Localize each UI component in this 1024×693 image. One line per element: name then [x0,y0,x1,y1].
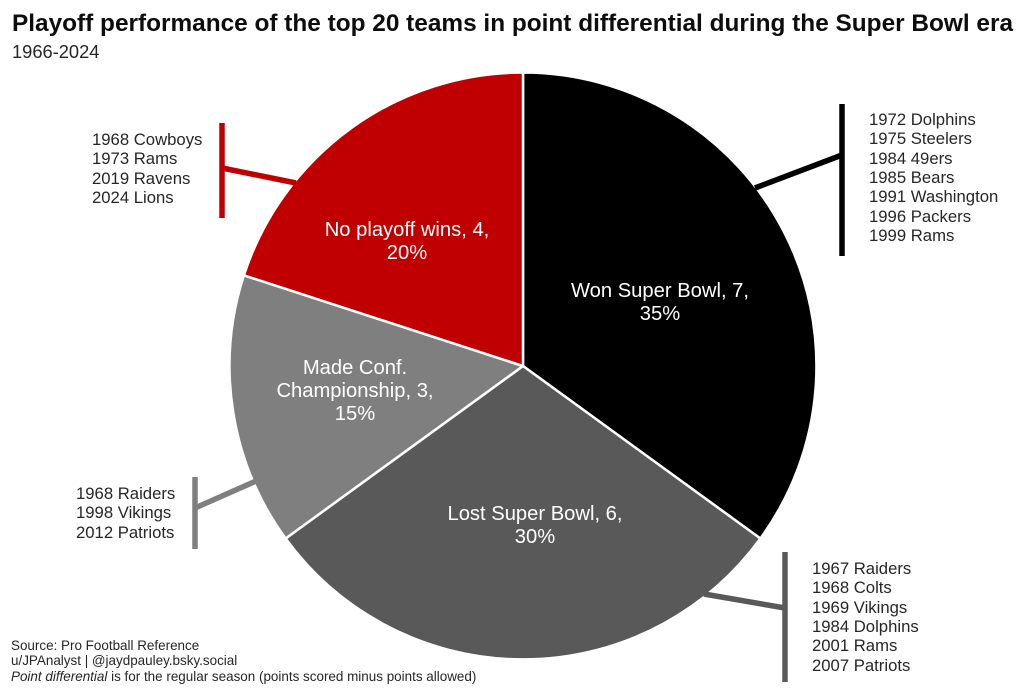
team list: won Super Bowl: 1996 Packers [869,207,971,226]
team list: lost Super Bowl: 1969 Vikings [812,598,907,617]
team list: made conference championship: 1998 Vikings [76,503,171,522]
title: Playoff performance of the top 20 teams in point differential during the Super Bowl era [12,10,1014,37]
team list: lost Super Bowl: 2007 Patriots [812,656,910,675]
bracket: won Super Bowl [755,104,842,256]
team list: made conference championship: 2012 Patriots [76,523,174,542]
bracket: lost Super Bowl [704,552,785,682]
team list: lost Super Bowl: 1968 Colts [812,578,892,597]
label: made conference championship: 15% [335,403,375,425]
team list: won Super Bowl: 1984 49ers [869,149,953,168]
label: no playoff wins: No playoff wins, 4, [325,219,489,241]
team list: lost Super Bowl: 1967 Raiders [812,559,911,578]
team list: won Super Bowl: 1985 Bears [869,168,954,187]
subtitle: 1966-2024 [12,41,99,62]
team list: won Super Bowl: 1972 Dolphins [869,110,976,129]
bracket: no playoff wins [222,123,296,218]
source note: u/JPAnalyst | @jaydpauley.bsky.social [11,653,237,668]
team list: no playoff wins: 1973 Rams [92,149,177,168]
team list: no playoff wins: 2019 Ravens [92,169,190,188]
team list: made conference championship: 1968 Raiders [76,484,175,503]
slice: won Super Bowl [523,72,816,538]
team list: no playoff wins: 2024 Lions [92,188,174,207]
team list: lost Super Bowl: 1984 Dolphins [812,617,919,636]
team list: won Super Bowl: 1975 Steelers [869,129,972,148]
label: lost Super Bowl: 30% [515,526,555,548]
team list: lost Super Bowl: 2001 Rams [812,636,897,655]
slice: made conference championship [230,275,523,538]
pie chart [230,72,816,659]
slice: lost Super Bowl [286,366,760,659]
source note: Point differential [11,669,108,684]
label: won Super Bowl: Won Super Bowl, 7, [571,280,749,302]
source note: Source: Pro Football Reference [11,638,199,653]
label: made conference championship: Championship, 3, [276,380,434,402]
bracket: made conference championship [195,477,256,549]
label: made conference championship: Made Conf. [303,357,407,379]
slice: no playoff wins [244,72,523,366]
label: no playoff wins: 20% [387,242,427,264]
team list: won Super Bowl: 1999 Rams [869,226,954,245]
team list: won Super Bowl: 1991 Washington [869,187,998,206]
source note: is for the regular season (points scored minus points allowed) [107,669,476,684]
team list: no playoff wins: 1968 Cowboys [92,130,202,149]
label: lost Super Bowl: Lost Super Bowl, 6, [447,503,623,525]
label: won Super Bowl: 35% [640,303,680,325]
